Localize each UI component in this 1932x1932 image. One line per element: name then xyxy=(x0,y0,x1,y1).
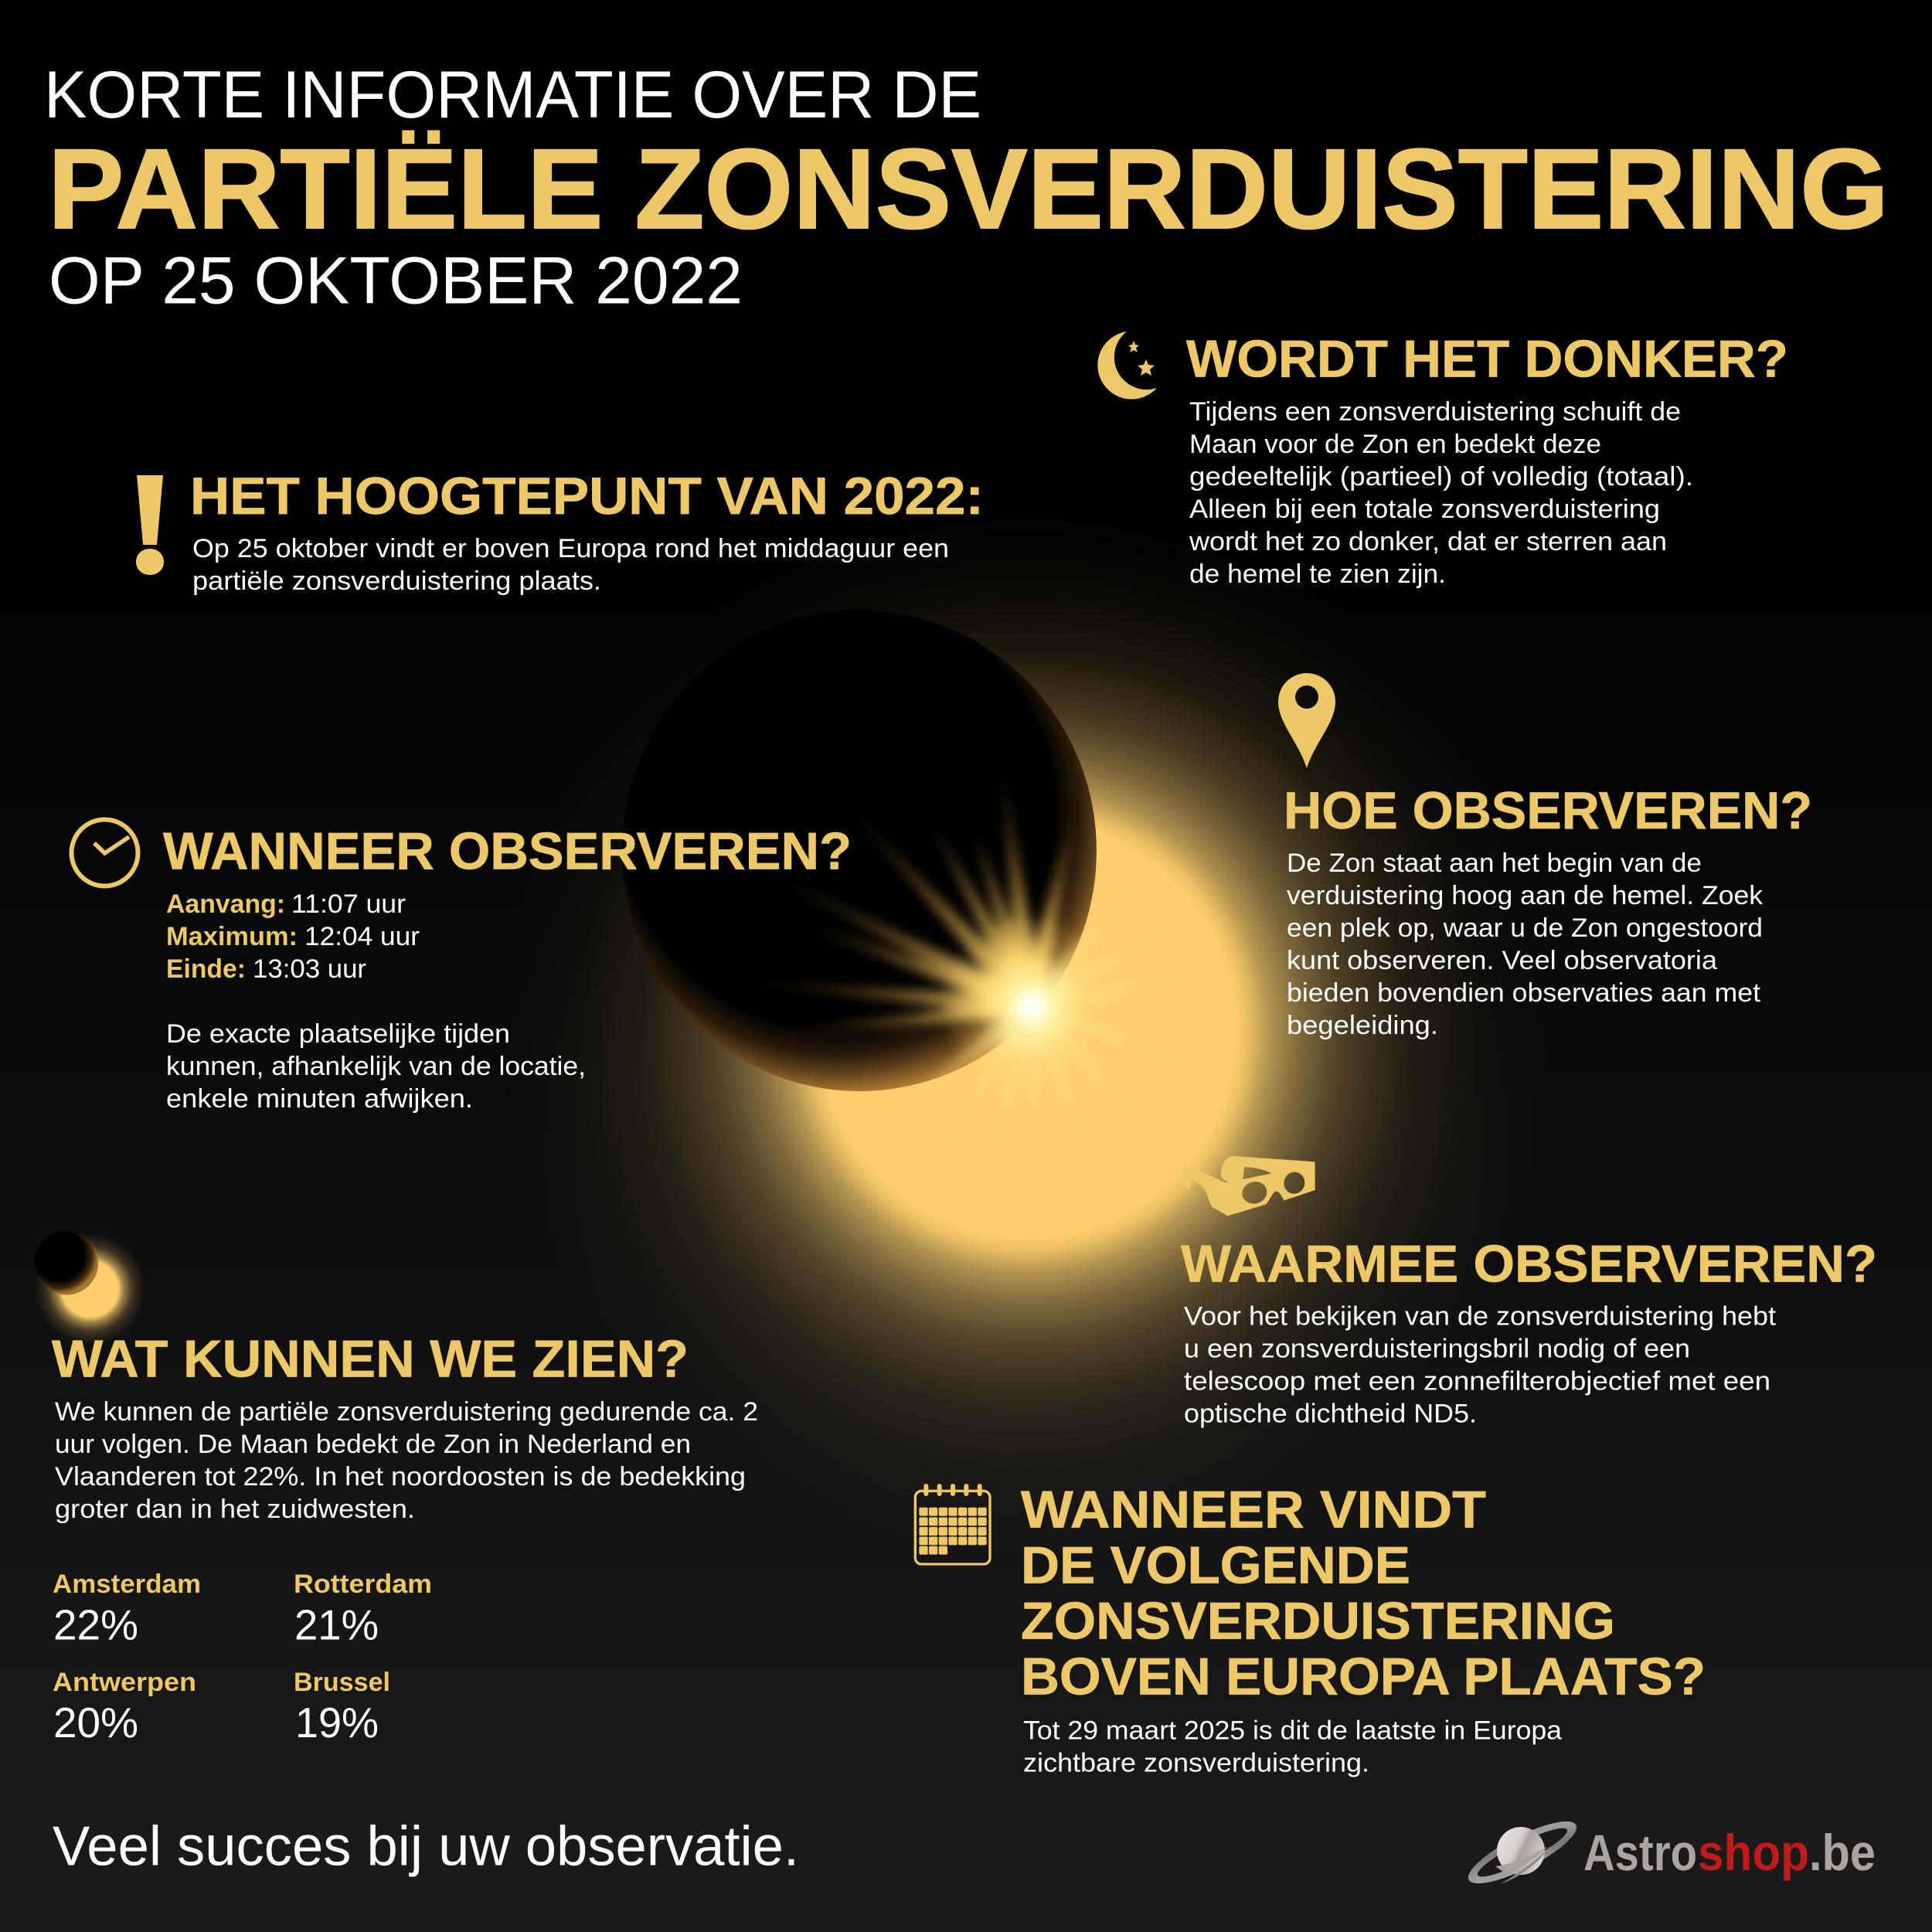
icon: calendar xyxy=(915,1484,990,1564)
closing message: Veel succes bij uw observatie. xyxy=(53,1816,799,1878)
icon: small partial eclipse xyxy=(34,1230,146,1345)
heading: WAARMEE OBSERVEREN? xyxy=(1181,1235,1877,1294)
text block: Op 25 oktober vindt er boven Europa rond het middaguur een xyxy=(192,534,949,563)
panel: waarmee observeren xyxy=(1181,1156,1877,1428)
wordmark: shop xyxy=(1698,1824,1809,1881)
title line 3: OP 25 OKTOBER 2022 xyxy=(49,244,743,318)
title xyxy=(44,58,1889,318)
heading xyxy=(1021,1481,1706,1706)
city: Brussel xyxy=(294,1668,390,1747)
text block: kunnen, afhankelijk van de locatie, xyxy=(166,1052,586,1081)
heading: WANNEER OBSERVEREN? xyxy=(163,822,852,881)
city: Amsterdam: Amsterdam xyxy=(53,1570,201,1599)
times: Einde: xyxy=(166,954,246,984)
text block: Tijdens een zonsverduistering schuift de xyxy=(1189,397,1681,427)
icon: clock xyxy=(71,819,138,886)
city: Antwerpen xyxy=(53,1668,196,1747)
city: Antwerpen: 20% xyxy=(53,1699,138,1747)
title line 1: KORTE INFORMATIE OVER DE xyxy=(44,58,981,132)
text block: De exacte plaatselijke tijden xyxy=(166,1019,510,1049)
text block: een plek op, waar u de Zon ongestoord xyxy=(1287,913,1763,943)
city: Brussel: Brussel xyxy=(294,1668,390,1697)
title line 2: PARTIËLE ZONSVERDUISTERING xyxy=(48,126,1889,253)
heading: ZONSVERDUISTERING xyxy=(1021,1592,1615,1651)
city: Antwerpen: Antwerpen xyxy=(53,1668,196,1697)
text block: kunt observeren. Veel observatoria xyxy=(1287,946,1717,975)
heading: DE VOLGENDE xyxy=(1021,1536,1410,1595)
text block: Tot 29 maart 2025 is dit de laatste in Europa xyxy=(1023,1716,1562,1745)
text block: groter dan in het zuidwesten. xyxy=(55,1495,415,1524)
icon: ringed planet xyxy=(1461,1811,1583,1894)
city: Rotterdam xyxy=(294,1570,432,1649)
text block: u een zonsverduisteringsbril nodig of een xyxy=(1184,1334,1690,1363)
icon: crescent moon and stars xyxy=(1097,332,1157,400)
text block xyxy=(166,1019,586,1114)
text block xyxy=(1189,397,1693,589)
times: 13:03 uur xyxy=(253,954,366,984)
text block: enkele minuten afwijken. xyxy=(166,1084,473,1114)
moon disc xyxy=(622,611,1097,1091)
panel: wat kunnen we zien xyxy=(34,1230,758,1747)
text block xyxy=(192,534,949,596)
eclipse illustration xyxy=(502,505,1553,1556)
times: 11:07 uur xyxy=(291,889,406,919)
heading: WORDT HET DONKER? xyxy=(1186,329,1788,388)
text block xyxy=(55,1397,758,1524)
text block: Alleen bij een totale zonsverduistering xyxy=(1189,495,1660,524)
text block: optische dichtheid ND5. xyxy=(1184,1399,1477,1428)
times: Aanvang: xyxy=(166,889,285,919)
panel: wordt het donker xyxy=(1097,329,1788,589)
text block: partiële zonsverduistering plaats. xyxy=(192,566,601,596)
text block xyxy=(1184,1301,1777,1428)
city: Brussel: 19% xyxy=(295,1699,379,1747)
text block: telescoop met een zonnefilterobjectief met een xyxy=(1184,1366,1770,1396)
text block: verduistering hoog aan de hemel. Zoek xyxy=(1287,881,1764,910)
city: Amsterdam: 22% xyxy=(53,1601,138,1649)
times: 12:04 uur xyxy=(304,922,420,951)
heading: HET HOOGTEPUNT VAN 2022: xyxy=(190,467,984,526)
sun with corona glow xyxy=(502,505,1553,1556)
text block xyxy=(1287,849,1764,1040)
text block: De Zon staat aan het begin van de xyxy=(1287,849,1702,878)
text block: gedeeltelijk (partieel) of volledig (totaal). xyxy=(1189,462,1693,492)
times: Maximum: xyxy=(166,922,298,951)
heading: WAT KUNNEN WE ZIEN? xyxy=(52,1329,689,1388)
text block: Vlaanderen tot 22%. In het noordoosten is de bedekking xyxy=(55,1462,746,1492)
text block: Voor het bekijken van de zonsverduistering hebt xyxy=(1184,1301,1777,1331)
wordmark: Astro xyxy=(1583,1824,1697,1881)
times xyxy=(166,889,420,984)
text block: de hemel te zien zijn. xyxy=(1189,560,1446,589)
panel: wanneer observeren xyxy=(71,819,852,1114)
text block: begeleiding. xyxy=(1287,1011,1438,1040)
heading: HOE OBSERVEREN? xyxy=(1284,781,1812,840)
icon: location pin xyxy=(1278,673,1335,768)
text block: zichtbare zonsverduistering. xyxy=(1023,1748,1369,1777)
panel: het hoogtepunt xyxy=(136,467,984,596)
text block: wordt het zo donker, dat er sterren aan xyxy=(1189,527,1667,556)
text block: bieden bovendien observaties aan met xyxy=(1287,978,1761,1008)
text block xyxy=(1023,1716,1562,1777)
icon: exclamation mark xyxy=(136,475,164,575)
heading: BOVEN EUROPA PLAATS? xyxy=(1021,1648,1706,1706)
wordmark: .be xyxy=(1809,1824,1876,1881)
logo: Astroshop.be xyxy=(1461,1811,1876,1894)
flare core xyxy=(939,914,1124,1100)
city: Rotterdam: 21% xyxy=(294,1601,379,1649)
city: Amsterdam xyxy=(53,1570,201,1649)
panel: hoe observeren xyxy=(1278,673,1812,1040)
light rays over the sun xyxy=(865,844,1235,1212)
text block: We kunnen de partiële zonsverduistering gedurende ca. 2 xyxy=(55,1397,758,1427)
text block: Maan voor de Zon en bedekt deze xyxy=(1189,430,1601,459)
light rays over the moon xyxy=(742,771,1083,1043)
icon: eclipse glasses xyxy=(1182,1156,1315,1216)
panel: volgende zonsverduistering xyxy=(915,1481,1706,1777)
city: Rotterdam: Rotterdam xyxy=(294,1570,432,1599)
heading: WANNEER VINDT xyxy=(1021,1481,1486,1539)
text block: uur volgen. De Maan bedekt de Zon in Nederland en xyxy=(55,1430,691,1459)
wordmark xyxy=(1583,1824,1876,1881)
